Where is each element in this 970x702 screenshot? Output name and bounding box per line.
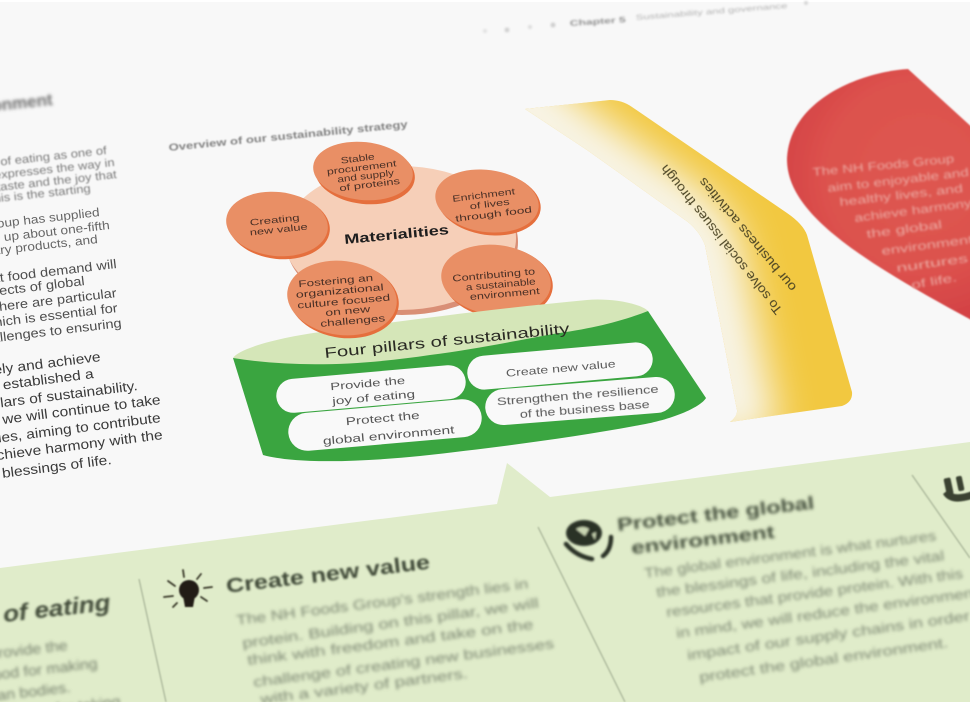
body text [235, 575, 555, 702]
circle: contributing to environment: environment [469, 286, 541, 303]
pill: provide the joy of eating: joy of eating [330, 388, 416, 408]
red teardrop [787, 69, 970, 322]
body text: resources that provide protein. With this [665, 565, 964, 620]
circle: fostering culture [283, 255, 403, 344]
body text: think with freedom and take on the [246, 616, 534, 668]
heading: environment [630, 522, 776, 558]
circle: fostering culture: organizational [295, 282, 384, 301]
materialities label: Materialities [344, 222, 450, 247]
heading: Create new value [225, 552, 431, 598]
bottom green panel with pointer [0, 442, 970, 702]
icon: next column cropped [943, 476, 970, 502]
pill: strengthen the resilience [484, 376, 676, 426]
pill: strengthen the resilience: of the business base [519, 399, 650, 421]
red teardrop: of life. [910, 272, 958, 292]
page header: Chapter 5 [570, 15, 627, 28]
icon: globe in hands [566, 520, 611, 559]
red teardrop: achieve harmony [854, 198, 970, 225]
platform heading: Four pillars of sustainability [324, 321, 571, 362]
circle: stable procurement: of proteins [339, 176, 401, 193]
body text: protect the global environment. [698, 634, 949, 685]
central disc [284, 166, 518, 315]
left body text column [0, 144, 163, 482]
icon: light bulb [164, 570, 212, 607]
pill: protect the global environment: Protect the [345, 410, 420, 428]
circle: stable procurement: procurement [326, 158, 398, 177]
red teardrop: The NH Foods Group [812, 153, 955, 179]
page header: Sustainability and governance [635, 1, 788, 22]
circle: fostering culture: culture focused [297, 292, 391, 312]
column: create new value [164, 552, 555, 702]
circle: stable procurement [310, 137, 418, 209]
red teardrop: the global [866, 219, 943, 241]
pill: create new value: Create new value [505, 358, 616, 380]
circle: creating new value: new value [249, 222, 308, 238]
yellow arrow band [525, 100, 852, 422]
circle: enrichment of lives: Enrichment [452, 186, 516, 204]
pill: strengthen the resilience: Strengthen the resilience [497, 384, 659, 408]
left body text column: up about one-fifth [3, 218, 110, 244]
circle: contributing to environment [437, 239, 557, 324]
circle: contributing to environment: Contributing to [452, 266, 536, 285]
circle: fostering culture: Fostering an [298, 273, 374, 290]
chart title: Overview of our sustainability strategy [168, 120, 409, 154]
panel column dividers [139, 475, 970, 702]
pill: create new value [466, 341, 654, 391]
red teardrop: aim to enjoyable and [827, 167, 969, 195]
four pillars platform [233, 300, 706, 461]
platform green base [233, 311, 706, 461]
circle: creating new value [223, 187, 333, 264]
body text: impact of our supply chains in order to [686, 605, 970, 663]
circle: enrichment of lives: through food [455, 204, 532, 224]
band text line 1: To solve social issues through [658, 162, 785, 317]
circle: enrichment of lives [431, 163, 545, 242]
body text [0, 638, 121, 702]
heading [616, 493, 815, 558]
pill: protect the global environment [287, 398, 483, 452]
body text: The global environment is what nurtures [643, 527, 937, 581]
body text: challenge of creating new businesses [252, 635, 555, 690]
heading: of eating [2, 590, 112, 628]
column: protect the global environment [566, 493, 970, 685]
platform top [233, 300, 648, 364]
circle: fostering culture: challenges [320, 313, 386, 330]
heading: Protect the global [616, 493, 815, 535]
page header [483, 1, 808, 33]
red teardrop: nurtures [896, 253, 969, 275]
pill: provide the joy of eating [275, 364, 467, 414]
body text: protein. Building on this pillar, we will [241, 595, 540, 651]
pill: provide the joy of eating: Provide the [330, 375, 406, 393]
materialities diagram [223, 137, 706, 461]
circle: stable procurement: and supply [337, 168, 395, 184]
column: provide the joy of eating [0, 590, 121, 702]
circle: stable procurement: Stable [340, 151, 375, 166]
left body text column: blessings of life. [1, 453, 112, 482]
red teardrop: healthy lives, and [839, 183, 964, 209]
circle: fostering culture: on new [325, 304, 371, 319]
red teardrop: environment [881, 234, 970, 258]
body text [643, 527, 970, 685]
body text: in mind, we will reduce the environmental [675, 582, 970, 641]
band text line 2: our business activities [696, 175, 799, 294]
body text: the blessings of life, including the vital [655, 547, 945, 600]
circle: creating new value: Creating [249, 212, 300, 228]
circle: contributing to environment: a sustainable [465, 276, 536, 294]
pill: protect the global environment: global environment [322, 424, 455, 448]
circle: enrichment of lives: of lives [469, 197, 511, 211]
body text: The NH Foods Group's strength lies in [235, 575, 529, 628]
left body text column: we will continue to take [0, 393, 161, 428]
